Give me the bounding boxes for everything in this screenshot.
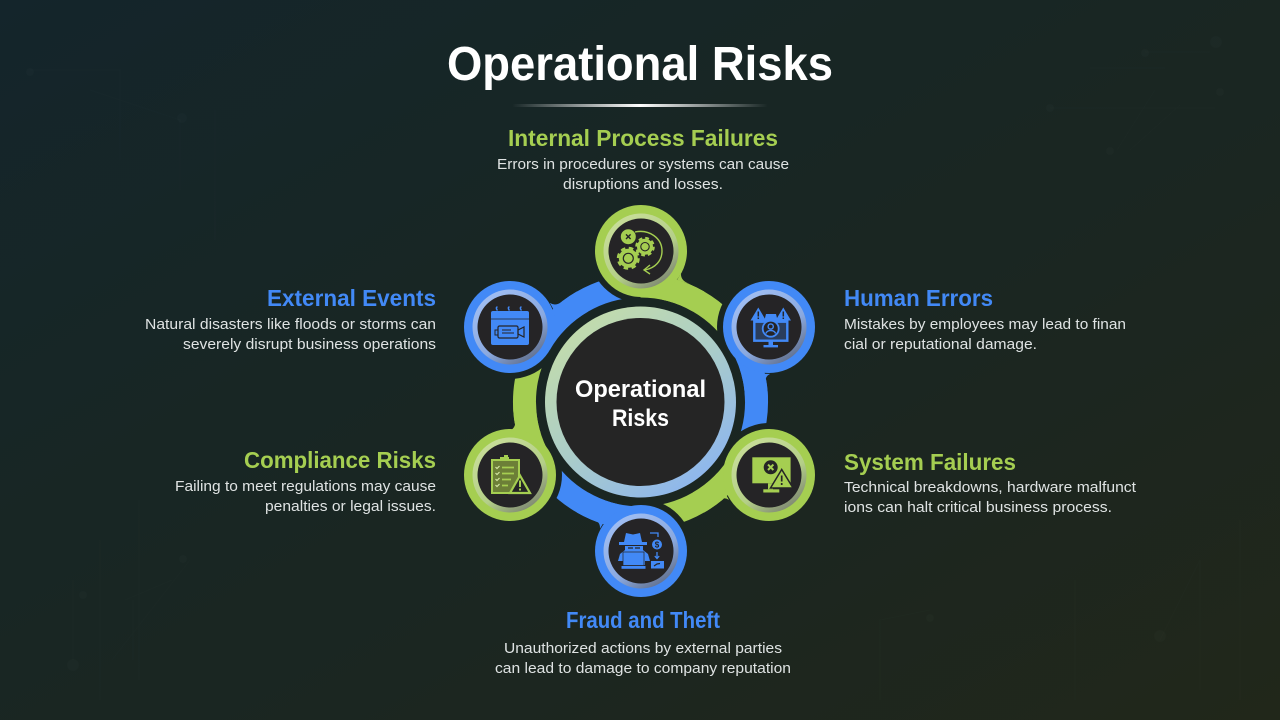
title underline <box>512 104 768 107</box>
node: fraud and theft <box>595 505 687 597</box>
text: external events: severely disrupt business operations <box>183 336 436 353</box>
node: system failures <box>723 429 815 521</box>
title: Operational Risks <box>447 38 833 91</box>
text: human errors: Mistakes by employees may lead to finan <box>844 316 1126 333</box>
text: internal process failures: Internal Process Failures <box>508 125 778 151</box>
text: human errors <box>844 285 1126 353</box>
central hub: Risks <box>612 405 669 432</box>
node: compliance risks <box>464 429 556 521</box>
text: compliance risks: Failing to meet regulations may cause <box>175 478 436 495</box>
icon: monitor with warnings and person <box>750 308 791 347</box>
text: external events <box>145 285 436 353</box>
text: compliance risks <box>175 447 436 515</box>
icon: clipboard with warning <box>492 455 530 493</box>
text: external events: External Events <box>267 285 436 311</box>
icon: calendar with video camera <box>491 307 529 345</box>
text: fraud and theft: can lead to damage to company reputation <box>495 660 791 677</box>
text: human errors: cial or reputational damage. <box>844 336 1037 353</box>
central hub: Operational <box>575 376 706 403</box>
text: fraud and theft <box>495 607 791 677</box>
text: internal process failures <box>497 125 789 193</box>
text: system failures: ions can halt critical business process. <box>844 499 1112 516</box>
text: internal process failures: disruptions and losses. <box>563 176 723 193</box>
text: compliance risks: penalties or legal issues. <box>265 498 436 515</box>
icon: hooded thief with laptop: $ <box>655 540 660 550</box>
text: external events: Natural disasters like floods or storms can <box>145 316 436 333</box>
ring segments <box>506 274 775 528</box>
text: internal process failures: Errors in procedures or systems can cause <box>497 156 789 173</box>
text: human errors: Human Errors <box>844 285 993 311</box>
node: external events <box>464 281 556 373</box>
icon: failed monitor with warning <box>752 457 793 492</box>
central hub <box>545 306 736 498</box>
text: system failures: Technical breakdowns, hardware malfunct <box>844 479 1137 496</box>
node: human errors <box>723 281 815 373</box>
node: internal process failures <box>595 205 687 297</box>
text: compliance risks: Compliance Risks <box>244 447 436 473</box>
text: system failures <box>844 449 1137 516</box>
text: fraud and theft: Unauthorized actions by external parties <box>504 640 782 657</box>
text: system failures: System Failures <box>844 449 1016 475</box>
text: fraud and theft: Fraud and Theft <box>566 607 720 633</box>
icon: gears with return arrow <box>618 229 662 274</box>
